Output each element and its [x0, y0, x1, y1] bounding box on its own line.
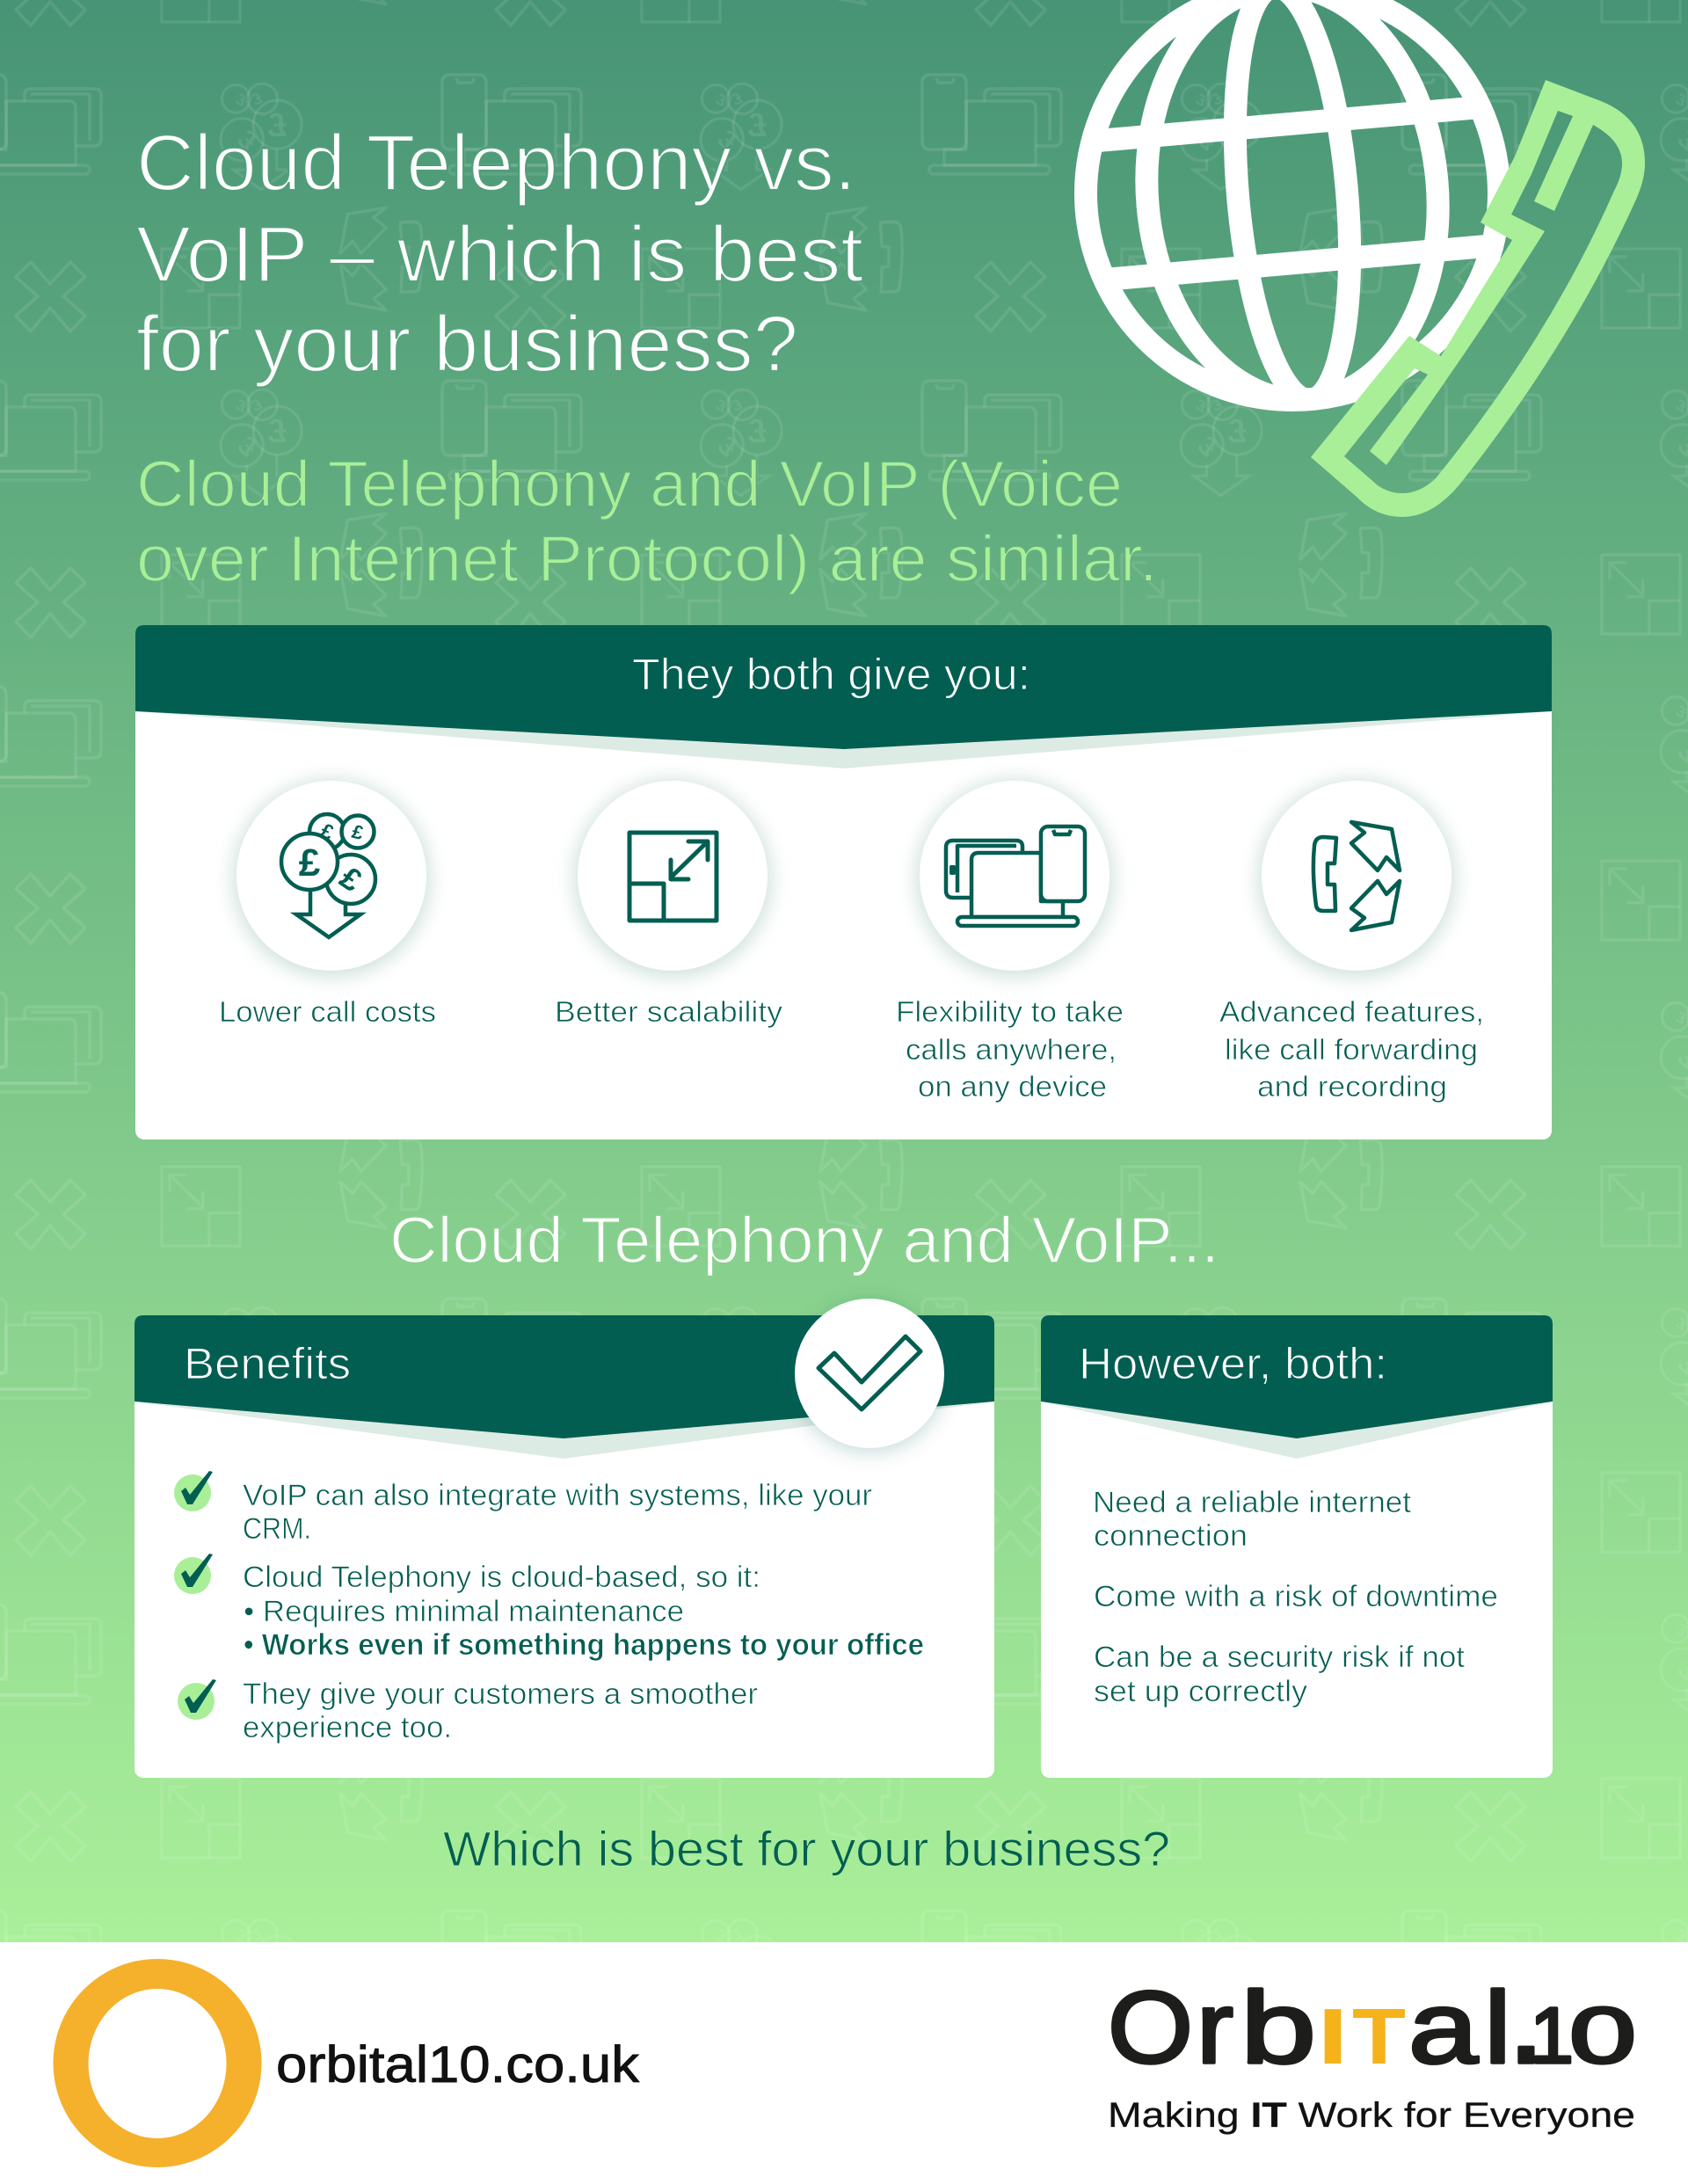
heading: However, both: [1079, 1339, 1387, 1388]
panel body [1041, 1315, 1553, 1778]
header shadow [1041, 1401, 1553, 1459]
icon: coins and down arrow: £ [333, 859, 368, 899]
icon: call forwarding [1313, 822, 1400, 930]
feature: lower call costs [219, 780, 436, 1028]
circle shadow [574, 780, 771, 977]
subtitle: over Internet Protocol) are similar. [136, 522, 1158, 595]
question: Which is best for your business? [443, 1821, 1170, 1876]
icon: scaling square [629, 833, 717, 921]
brand logo: l [1484, 1970, 1511, 2085]
benefit 2: Cloud Telephony is cloud-based, so it: [243, 1561, 760, 1594]
circle shadow [1258, 780, 1455, 977]
icon: coins and down arrow: £ [350, 820, 367, 844]
benefit 2 [174, 1554, 924, 1662]
icon: coins and down arrow: £ [316, 819, 338, 846]
subtitle: Cloud Telephony and VoIP (Voice [136, 448, 1123, 521]
section heading: Cloud Telephony and VoIP... [389, 1204, 1219, 1277]
feature: better scalability [555, 780, 783, 1028]
brand logo: b [1241, 1970, 1316, 2085]
feature: advanced features [1219, 780, 1484, 1103]
footer [0, 1932, 1688, 2184]
website: orbital10.co.uk [276, 2036, 640, 2093]
subtitle [136, 448, 1158, 595]
badge: check mark [794, 1299, 945, 1452]
handset [1311, 80, 1645, 517]
brand logo: O [1108, 1970, 1193, 2085]
label: calls anywhere, [906, 1033, 1117, 1066]
benefit 2: • Works even if something happens to your office [244, 1628, 924, 1662]
brand logo: T [1352, 1993, 1406, 2081]
title: VoIP – which is best [136, 211, 863, 299]
label: like call forwarding [1225, 1033, 1478, 1066]
brand logo: 1 [1530, 1992, 1574, 2080]
panel body [135, 625, 1552, 1139]
benefit 2: • Requires minimal maintenance [244, 1595, 684, 1628]
label: Better scalability [555, 995, 783, 1028]
panel body [135, 1315, 994, 1778]
heading: Benefits [184, 1339, 351, 1388]
point 1: connection [1094, 1519, 1248, 1553]
header band [135, 625, 1552, 749]
circle [578, 781, 768, 971]
panel: however both [1041, 1315, 1553, 1778]
benefit 3: experience too. [243, 1711, 452, 1744]
brand logo: 0 [1569, 1992, 1636, 2080]
title: for your business? [136, 301, 798, 389]
brand logo: r [1197, 1970, 1233, 2085]
point 1 [1093, 1486, 1412, 1553]
brand logo: . [1506, 1932, 1546, 2093]
label: and recording [1257, 1070, 1447, 1103]
point 3: set up correctly [1094, 1675, 1307, 1708]
circle shadow [233, 780, 430, 977]
label: Flexibility to take [896, 995, 1124, 1028]
header band [135, 1315, 994, 1438]
label: Lower call costs [219, 995, 436, 1028]
circle shadow [916, 780, 1113, 977]
benefit 1: CRM. [243, 1512, 311, 1546]
label: on any device [918, 1070, 1107, 1103]
benefit 1: VoIP can also integrate with systems, like your [243, 1479, 872, 1512]
point 3: Can be a security risk if not [1094, 1641, 1466, 1674]
icon: devices [946, 826, 1085, 926]
point 1: Need a reliable internet [1093, 1486, 1412, 1519]
icon: coins and down arrow [281, 814, 375, 937]
point 3 [1094, 1641, 1466, 1708]
icon: coins and down arrow: £ [299, 841, 321, 885]
label [896, 995, 1124, 1103]
label: Advanced features, [1219, 995, 1484, 1028]
heading: They both give you: [632, 650, 1030, 699]
logo ring [54, 1959, 262, 2167]
panel: benefits [135, 1299, 994, 1778]
brand logo [1108, 1932, 1636, 2093]
header shadow [135, 1401, 994, 1459]
label [1219, 995, 1484, 1103]
circle [1262, 781, 1452, 971]
brand logo: a [1408, 1970, 1479, 2085]
panel: they both give you [135, 625, 1552, 1139]
circle [236, 781, 426, 971]
header shadow [135, 711, 1552, 768]
title [136, 120, 863, 389]
brand logo: I [1317, 1993, 1349, 2081]
benefit 1 [174, 1471, 872, 1546]
header band [1041, 1315, 1553, 1438]
tagline: Making IT Work for Everyone [1108, 2096, 1635, 2135]
benefit 3: They give your customers a smoother [243, 1678, 758, 1711]
title: Cloud Telephony vs. [136, 120, 856, 207]
icon: globe with telephone handset [1037, 0, 1645, 517]
benefit 3 [178, 1678, 758, 1744]
point 2: Come with a risk of downtime [1094, 1580, 1498, 1613]
footer background [0, 1942, 1688, 2184]
circle [920, 781, 1110, 971]
globe [1074, 0, 1509, 411]
feature: flexibility [896, 780, 1124, 1103]
